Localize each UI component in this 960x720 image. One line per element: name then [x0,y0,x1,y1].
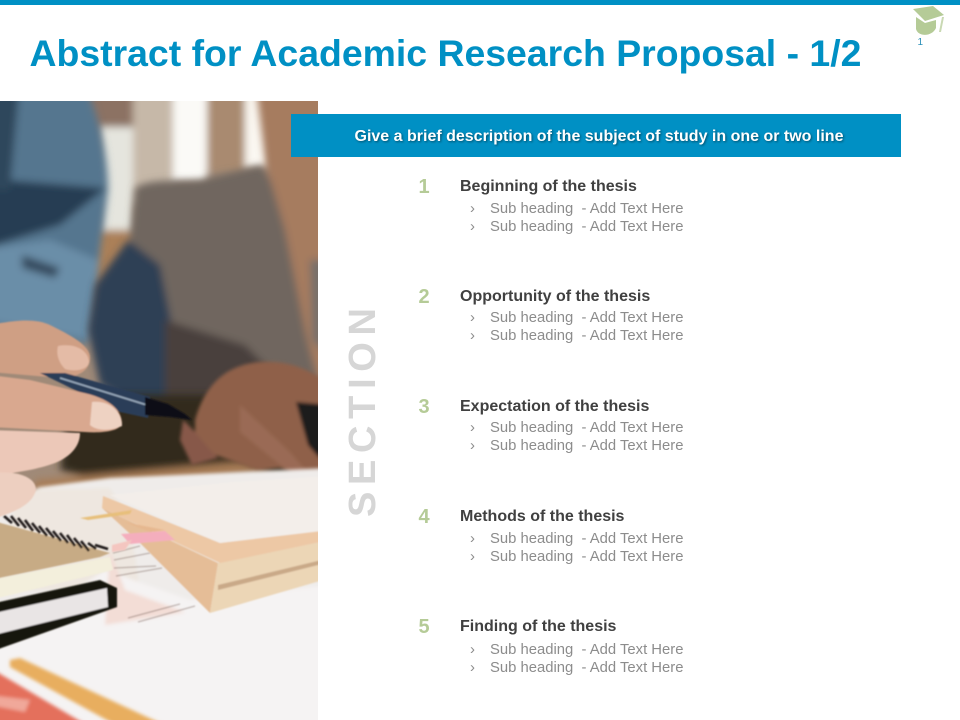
right person sweater [88,80,330,415]
text: › [470,328,475,344]
text: Sub heading - Add Text Here [490,310,683,326]
text: 3 [418,396,430,418]
text: › [470,642,475,658]
text: › [470,219,475,235]
text: Sub heading - Add Text Here [490,531,683,547]
printed text lines [113,546,195,622]
text: 4 [418,506,430,528]
text: 2 [418,286,430,308]
list item 4 [418,506,683,565]
text: › [470,201,475,217]
list item 3 [418,396,683,454]
list item 1 [418,176,683,235]
text: Sub heading - Add Text Here [490,642,683,658]
text: Beginning of the thesis [460,178,637,195]
left hand and pen [0,320,192,520]
text: Sub heading - Add Text Here [490,549,683,565]
icon: graduation cap [913,6,944,35]
list item 2 [418,286,683,344]
text: Finding of the thesis [460,618,616,635]
list item 5 [418,616,683,676]
page number: 1 [918,37,923,48]
photo: hands, pen and books on a desk [0,101,318,720]
text: › [470,420,475,436]
right hand [180,362,330,480]
table and paper [0,468,330,720]
text: 1 [418,176,430,198]
text: › [470,549,475,565]
window and wall background [85,80,270,310]
text: Sub heading - Add Text Here [490,219,683,235]
text: Expectation of the thesis [460,398,649,415]
title: Abstract for Academic Research Proposal - 1/2 [30,32,861,74]
open book [80,476,330,613]
description banner: Give a brief description of the subject of study in one or two line [355,128,843,145]
left person denim [0,80,108,345]
text: Sub heading - Add Text Here [490,328,683,344]
text: › [470,438,475,454]
text: Opportunity of the thesis [460,288,650,305]
text: › [470,660,475,676]
text: Sub heading - Add Text Here [490,438,683,454]
text: › [470,310,475,326]
dark area under hands [35,395,330,497]
notebooks [0,516,117,652]
text: Sub heading - Add Text Here [490,660,683,676]
text: › [470,531,475,547]
top accent bar [0,0,960,5]
description banner [291,114,901,157]
text: Methods of the thesis [460,508,624,525]
text: 5 [418,616,430,638]
text: Sub heading - Add Text Here [490,201,683,217]
text: Sub heading - Add Text Here [490,420,683,436]
coloured tabs [0,658,175,720]
